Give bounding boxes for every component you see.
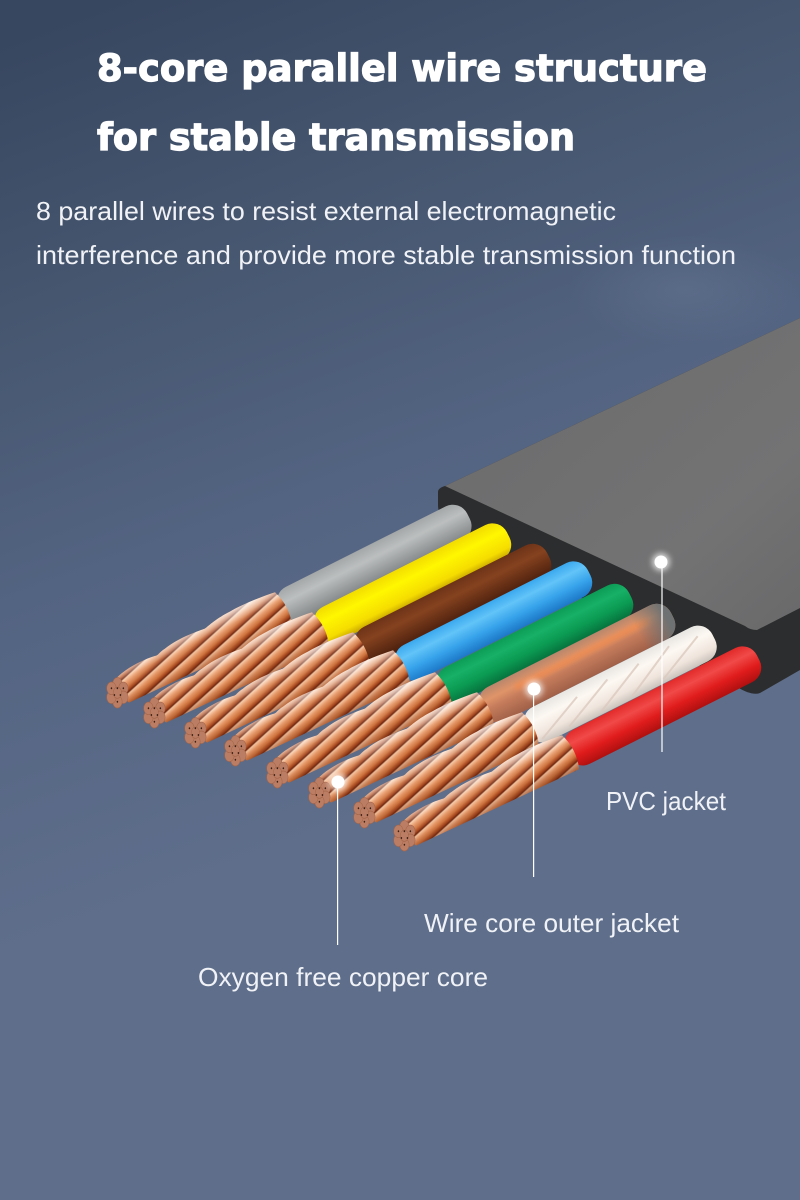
wire: blue (211, 553, 598, 775)
callout: wire core outer jacket (424, 680, 680, 938)
wire: translucent white (340, 617, 722, 837)
wire: yellow (130, 515, 517, 737)
wire: translucent copper (295, 595, 681, 817)
callout: oxygen free copper core: Oxygen free copper core (198, 962, 488, 992)
wire: grey (93, 496, 477, 717)
description text: 8 parallel wires to resist external electromagnetic (36, 196, 616, 226)
title: for stable transmission (97, 116, 575, 159)
callout: wire core outer jacket: Wire core outer jacket (424, 908, 680, 938)
description text: interference and provide more stable transmission function (36, 240, 736, 270)
wire: brown (171, 535, 557, 757)
background glow (570, 235, 800, 345)
callout: PVC jacket (606, 553, 727, 816)
flat cable PVC body (438, 318, 800, 694)
callout: oxygen free copper core (198, 773, 488, 992)
callout: PVC jacket: PVC jacket (606, 786, 727, 816)
title: 8-core parallel wire structure (97, 47, 707, 90)
description text (36, 196, 736, 270)
eight wires (93, 496, 767, 860)
wire: green (253, 575, 639, 797)
title (97, 47, 707, 159)
wire: red (380, 638, 767, 860)
